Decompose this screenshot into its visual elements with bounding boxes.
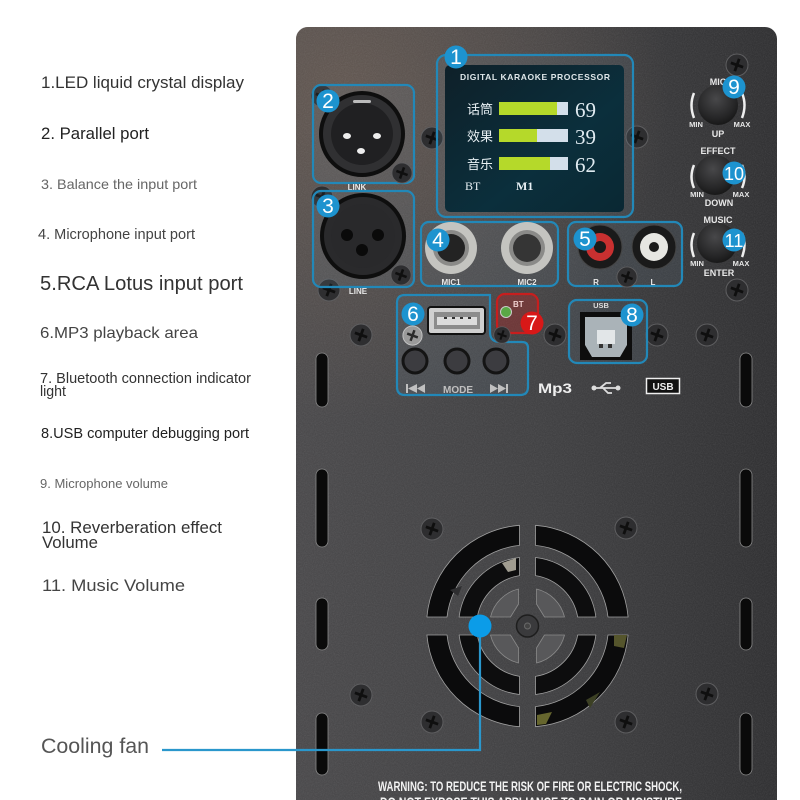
knob: effect volume: MAX <box>733 190 749 199</box>
level values <box>575 98 596 177</box>
printed marks: USB <box>652 382 674 393</box>
XLR balance port <box>313 191 414 296</box>
MP3 playback area <box>397 295 528 396</box>
fan marker dot <box>468 614 492 638</box>
knob: microphone volume: UP <box>712 129 724 139</box>
label: Bluetooth indicator <box>40 371 251 400</box>
LCD screen <box>445 65 624 212</box>
label: microphone volume: 9. Microphone volume <box>40 477 168 491</box>
USB-A socket <box>428 307 485 334</box>
number badges: 6 <box>407 303 419 326</box>
callout box 1 <box>437 55 633 217</box>
knob: microphone volume: MAX <box>734 120 750 129</box>
label: reverberation volume: Volume <box>42 534 98 552</box>
knob: microphone volume: MIN <box>689 120 703 129</box>
label: Bluetooth indicator: light <box>40 384 66 400</box>
number badges: 3 <box>322 195 334 218</box>
knob: effect volume: DOWN <box>705 198 733 208</box>
number badges: 11 <box>725 231 743 251</box>
knob: microphone volume <box>689 77 750 139</box>
fan internals seen through slots <box>450 558 627 725</box>
number badges: 8 <box>626 304 638 327</box>
level values: 39 <box>575 125 596 149</box>
knob: effect volume: EFFECT <box>700 146 736 156</box>
number badges: 5 <box>579 228 591 251</box>
knob: effect volume <box>690 146 749 208</box>
player buttons <box>403 349 508 373</box>
knob: effect volume: MIN <box>690 190 704 199</box>
cooling fan grille <box>427 525 628 727</box>
XLR balance port: LINE <box>349 287 368 296</box>
panel: amplifier back plate <box>296 27 777 800</box>
printed marks: Mp3 <box>538 380 572 396</box>
panel screws <box>311 54 748 733</box>
screen title: DIGITAL KARAOKE PROCESSOR <box>460 72 610 82</box>
label: microphone input: 4. Microphone input port <box>38 227 195 243</box>
USB debugging port <box>569 300 647 363</box>
knob: music volume: MAX <box>733 259 749 268</box>
level bars <box>499 102 568 170</box>
display module <box>437 55 633 217</box>
Bluetooth indicator: BT <box>513 300 524 309</box>
level names: 话筒 <box>467 102 493 117</box>
XLR parallel port <box>313 85 414 192</box>
level names: 音乐 <box>467 157 493 172</box>
microphone jacks <box>421 222 558 287</box>
leader line: cooling fan <box>162 626 480 750</box>
status line: BT <box>465 179 481 193</box>
level names <box>467 102 493 172</box>
knob: music volume: MUSIC <box>704 215 733 225</box>
label: parallel port: 2. Parallel port <box>41 124 149 143</box>
label: reverberation volume <box>42 519 222 552</box>
number badges: 4 <box>432 229 444 252</box>
knob: music volume <box>690 215 749 278</box>
label: reverberation volume: 10. Reverberation effect <box>42 519 222 537</box>
printed marks <box>538 378 680 396</box>
XLR parallel port: LINK <box>348 183 367 192</box>
warning text: WARNING: TO REDUCE THE RISK OF FIRE OR ELECTRIC SHOCK, <box>378 779 682 794</box>
RCA input jacks <box>568 222 682 287</box>
number badges: 10 <box>724 164 744 184</box>
level names: 效果 <box>467 129 493 144</box>
label: balance input: 3. Balance the input port <box>41 176 197 192</box>
label: music volume: 11. Music Volume <box>42 576 185 595</box>
status line <box>465 179 533 193</box>
label: Bluetooth indicator: 7. Bluetooth connection indicator <box>40 371 251 387</box>
level values: 62 <box>575 153 596 177</box>
level values: 69 <box>575 98 596 122</box>
label: USB debugging port: 8.USB computer debugging port <box>41 426 249 442</box>
number badges: 7 <box>526 312 538 335</box>
warning text <box>378 779 682 800</box>
microphone jacks: MIC2 <box>517 278 537 287</box>
knob: music volume: ENTER <box>704 268 735 278</box>
label: MP3 playback: 6.MP3 playback area <box>40 325 198 342</box>
label: LED display: 1.LED liquid crystal display <box>41 73 244 92</box>
number badges <box>316 46 746 335</box>
label: RCA input: 5.RCA Lotus input port <box>40 273 243 295</box>
knob: music volume: MIN <box>690 259 704 268</box>
knob: microphone volume: MIC <box>710 77 727 87</box>
RCA input jacks: L <box>651 278 656 287</box>
ventilation slots <box>316 353 752 775</box>
number badges: 1 <box>450 46 462 69</box>
microphone jacks: MIC1 <box>441 278 461 287</box>
RCA input jacks: R <box>593 278 599 287</box>
number badges: 9 <box>728 76 740 99</box>
number badges: 2 <box>322 90 334 113</box>
label: cooling fan: Cooling fan <box>41 735 149 758</box>
player icons <box>406 384 508 393</box>
MP3 playback area: MODE <box>443 385 473 396</box>
status line: M1 <box>516 179 533 193</box>
USB debugging port: USB <box>593 301 609 310</box>
Bluetooth indicator <box>494 294 538 343</box>
